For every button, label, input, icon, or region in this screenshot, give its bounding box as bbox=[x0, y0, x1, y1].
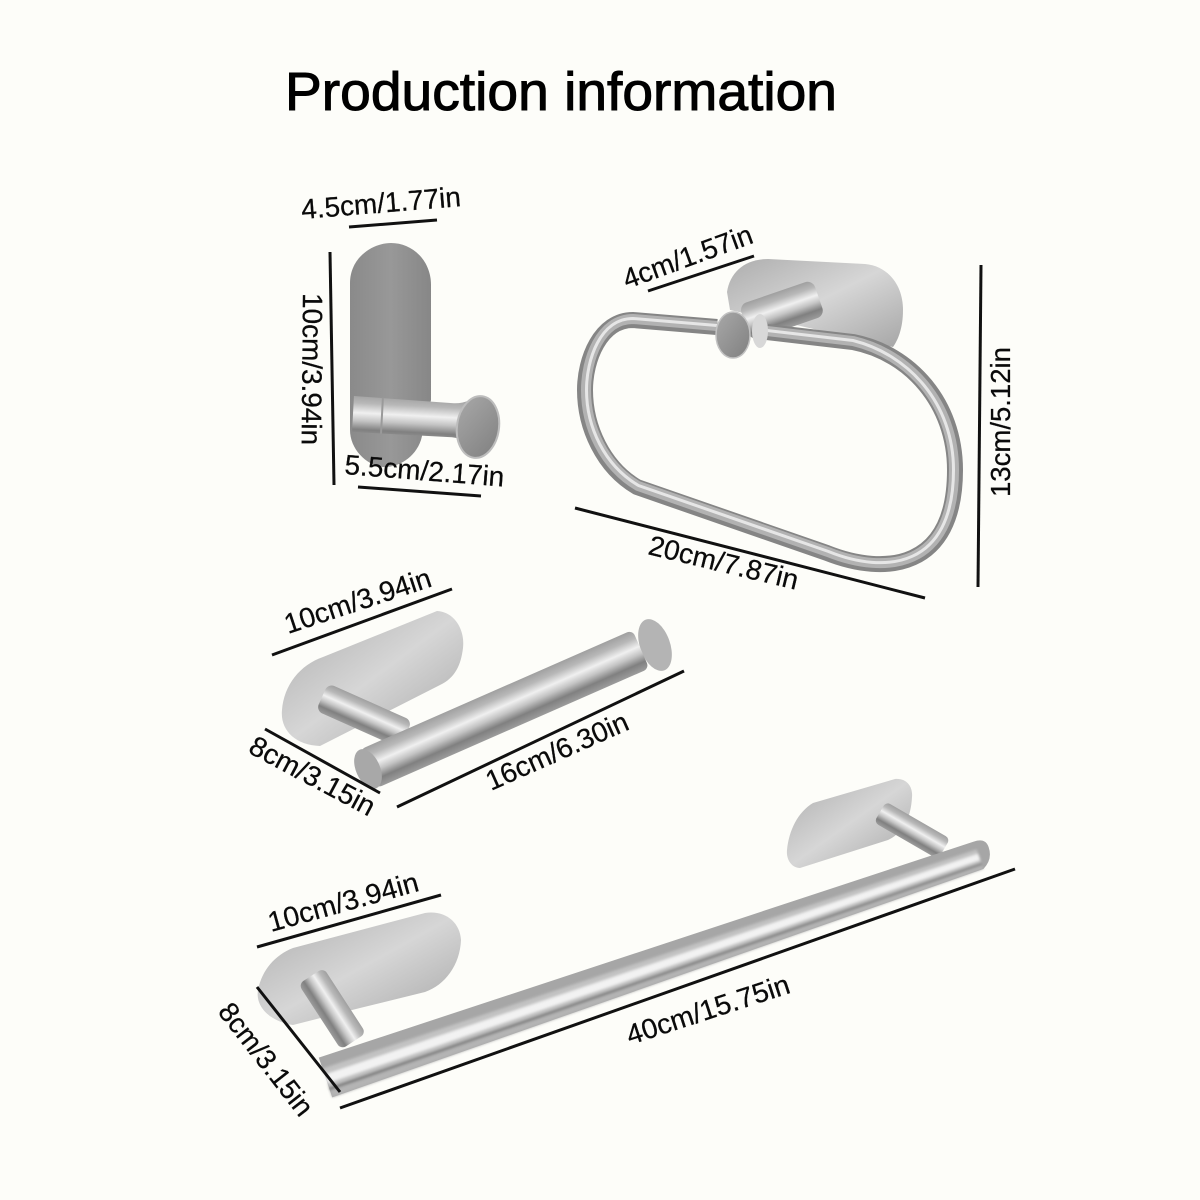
bar width line bbox=[257, 895, 441, 947]
bar depth line bbox=[257, 987, 340, 1092]
hook end cap bbox=[453, 393, 503, 461]
hook height label: 10cm/3.94in bbox=[296, 293, 328, 445]
ring height line bbox=[978, 265, 981, 587]
holder depth line bbox=[265, 729, 380, 793]
right post bbox=[874, 802, 950, 859]
bar width label: 10cm/3.94in bbox=[264, 866, 422, 938]
holder width label: 10cm/3.94in bbox=[280, 562, 435, 640]
hook depth label: 5.5cm/2.17in bbox=[344, 449, 505, 493]
hook depth line bbox=[358, 487, 481, 496]
hook back plate bbox=[350, 243, 431, 467]
ring top line bbox=[648, 256, 754, 291]
bar depth label: 8cm/3.15in bbox=[212, 997, 320, 1122]
ring width line bbox=[575, 508, 925, 598]
right back plate bbox=[787, 779, 912, 868]
ring collar bbox=[752, 314, 768, 348]
bar length line bbox=[340, 869, 1015, 1108]
holder width line bbox=[272, 589, 452, 655]
holder back plate bbox=[282, 611, 463, 746]
hook height line bbox=[330, 252, 334, 485]
ring tube bbox=[585, 318, 955, 564]
hook width line bbox=[349, 220, 437, 227]
product: wall hook bbox=[296, 181, 505, 496]
bar length label: 40cm/15.75in bbox=[622, 969, 794, 1051]
product: towel bar bbox=[212, 779, 1015, 1122]
product: towel ring bbox=[575, 219, 1016, 598]
ring post bbox=[739, 280, 825, 341]
holder post bbox=[316, 683, 412, 748]
ring top label: 4cm/1.57in bbox=[618, 219, 757, 295]
holder bar bbox=[349, 630, 649, 793]
main bar bbox=[319, 832, 997, 1097]
hook width label: 4.5cm/1.77in bbox=[300, 181, 462, 225]
left post bbox=[298, 968, 366, 1050]
title: Production information bbox=[285, 62, 837, 122]
ring height label: 13cm/5.12in bbox=[985, 347, 1016, 497]
left back plate bbox=[258, 913, 461, 1025]
ring width label: 20cm/7.87in bbox=[646, 530, 802, 596]
holder far end flange bbox=[632, 614, 678, 676]
ring head bbox=[716, 312, 750, 358]
holder length label: 16cm/6.30in bbox=[481, 706, 633, 796]
holder length line bbox=[397, 671, 684, 807]
product: toilet paper holder bbox=[244, 562, 684, 822]
holder depth label: 8cm/3.15in bbox=[244, 730, 381, 822]
hook post bbox=[352, 394, 470, 444]
ring back plate bbox=[727, 259, 903, 347]
